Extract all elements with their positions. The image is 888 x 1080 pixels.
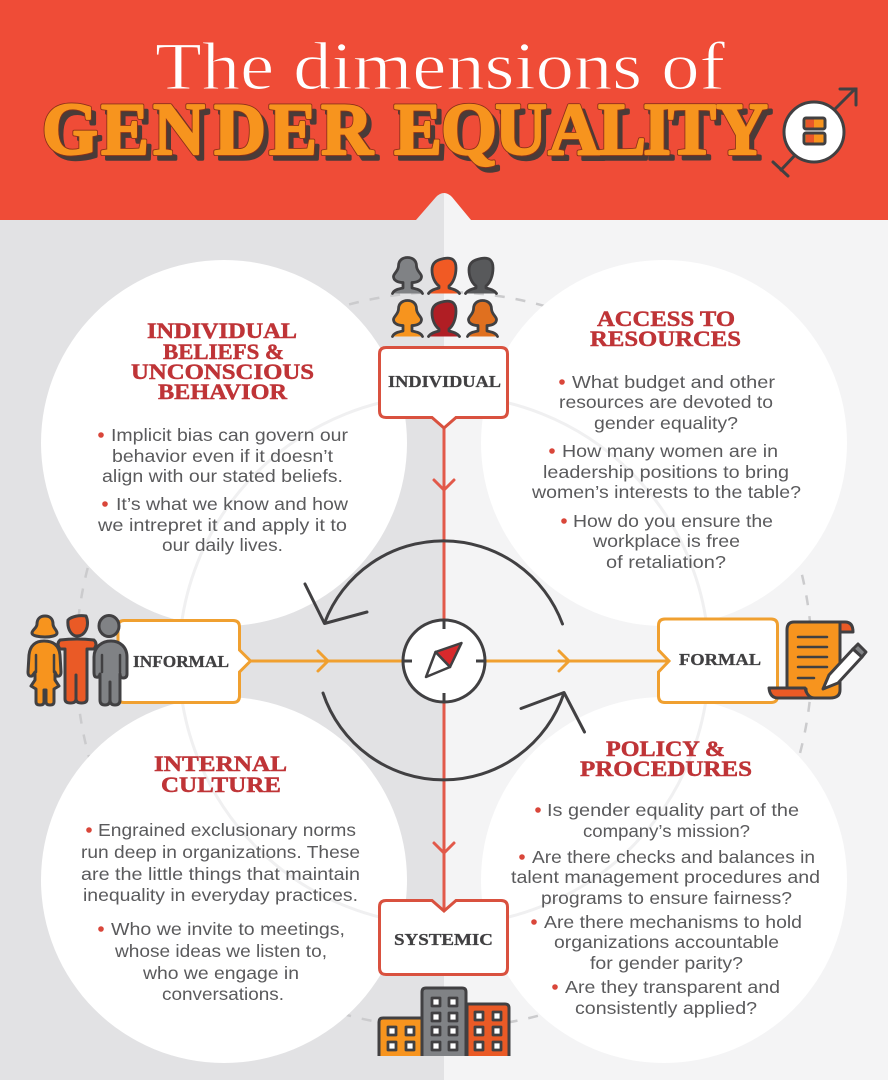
body text: conversations.	[162, 984, 284, 1004]
body text: What budget and other	[572, 372, 775, 392]
heading: RESOURCES	[590, 326, 741, 351]
panel: policy and procedures	[511, 736, 820, 1018]
heading	[131, 318, 314, 404]
dashed outer ring	[76, 292, 812, 1028]
panel: access to resources	[531, 306, 801, 572]
body text: workplace is free	[592, 531, 740, 551]
title line 2: GENDER EQUALITY	[42, 88, 768, 170]
inner ring	[179, 395, 709, 925]
title line 2: GENDER EQUALITY	[42, 88, 768, 170]
body text	[531, 372, 801, 572]
body text: consistently applied?	[575, 998, 757, 1018]
box: individual	[380, 348, 508, 428]
person: man	[58, 616, 96, 703]
lower cycle arrow	[323, 692, 584, 780]
body text: women’s interests to the table?	[531, 482, 801, 502]
box: informal: INFORMAL	[133, 652, 229, 671]
body text: Implicit bias can govern our	[111, 425, 348, 445]
heading: INTERNAL	[154, 751, 287, 776]
upper cycle arrow	[305, 541, 562, 624]
body text: It’s what we know and how	[116, 494, 348, 514]
body text: Who we invite to meetings,	[111, 919, 345, 939]
horizontal axis arrow	[251, 651, 669, 671]
body text: Engrained exclusionary norms	[98, 820, 356, 840]
heading: CULTURE	[161, 772, 281, 797]
panel: internal culture	[81, 751, 360, 1004]
heading: PROCEDURES	[580, 756, 752, 781]
heading: ACCESS TO	[597, 306, 735, 331]
icon: buildings	[379, 988, 509, 1056]
body text	[81, 820, 360, 1004]
body text: of retaliation?	[606, 552, 726, 572]
box: individual: INDIVIDUAL	[388, 372, 501, 391]
person: gray man	[94, 616, 127, 705]
person: woman	[28, 616, 61, 705]
title	[42, 28, 772, 175]
body text: inequality in everyday practices.	[83, 885, 358, 905]
body text: resources are devoted to	[559, 392, 773, 412]
body text	[97, 425, 348, 555]
body text: who we engage in	[142, 963, 299, 983]
vertical axis arrow	[434, 428, 454, 911]
body text: run deep in organizations. These	[81, 842, 360, 862]
body text	[511, 800, 820, 1018]
box: informal	[118, 620, 250, 702]
icon: gender symbol	[773, 89, 856, 176]
heading: INDIVIDUAL	[147, 318, 297, 343]
heading: POLICY &	[606, 736, 725, 761]
heading	[580, 736, 752, 781]
body text: talent management procedures and	[511, 867, 820, 887]
panel: individual beliefs	[97, 318, 348, 555]
body text: gender equality?	[594, 413, 738, 433]
icon: scroll and pencil	[769, 622, 866, 698]
box: systemic: SYSTEMIC	[394, 930, 493, 949]
body text: align with our stated beliefs.	[102, 466, 343, 486]
box: formal: FORMAL	[679, 650, 761, 669]
header banner	[0, 0, 888, 220]
heading	[154, 751, 287, 797]
body text: organizations accountable	[554, 932, 779, 952]
heading: BELIEFS &	[163, 339, 284, 364]
heading	[590, 306, 741, 351]
body text: Are there checks and balances in	[532, 847, 815, 867]
title line 2: GENDER EQUALITY	[46, 93, 772, 175]
body text: Is gender equality part of the	[547, 800, 799, 820]
body text: programs to ensure fairness?	[541, 888, 792, 908]
box: formal	[658, 619, 778, 702]
title line 1: The dimensions of	[155, 28, 725, 104]
icon: three people	[28, 616, 127, 705]
body text: How many women are in	[562, 441, 778, 461]
box: systemic	[380, 900, 508, 974]
body text: leadership positions to bring	[543, 462, 789, 482]
body text: behavior even if it doesn’t	[112, 446, 333, 466]
icon: six people	[392, 258, 498, 336]
body text: are the little things that maintain	[81, 864, 360, 884]
body text: Are there mechanisms to hold	[544, 912, 802, 932]
compass	[403, 620, 485, 702]
body text: company’s mission?	[583, 821, 750, 841]
body text: Are they transparent and	[565, 977, 780, 997]
body text: whose ideas we listen to,	[114, 941, 327, 961]
body text: How do you ensure the	[573, 511, 773, 531]
body text: our daily lives.	[162, 535, 283, 555]
body text: we intrepret it and apply it to	[97, 515, 347, 535]
heading: BEHAVIOR	[158, 379, 288, 404]
heading: UNCONSCIOUS	[131, 359, 314, 384]
body text: for gender parity?	[590, 953, 743, 973]
cycle arrows	[305, 541, 584, 780]
panel: circle backgrounds	[41, 260, 847, 1063]
